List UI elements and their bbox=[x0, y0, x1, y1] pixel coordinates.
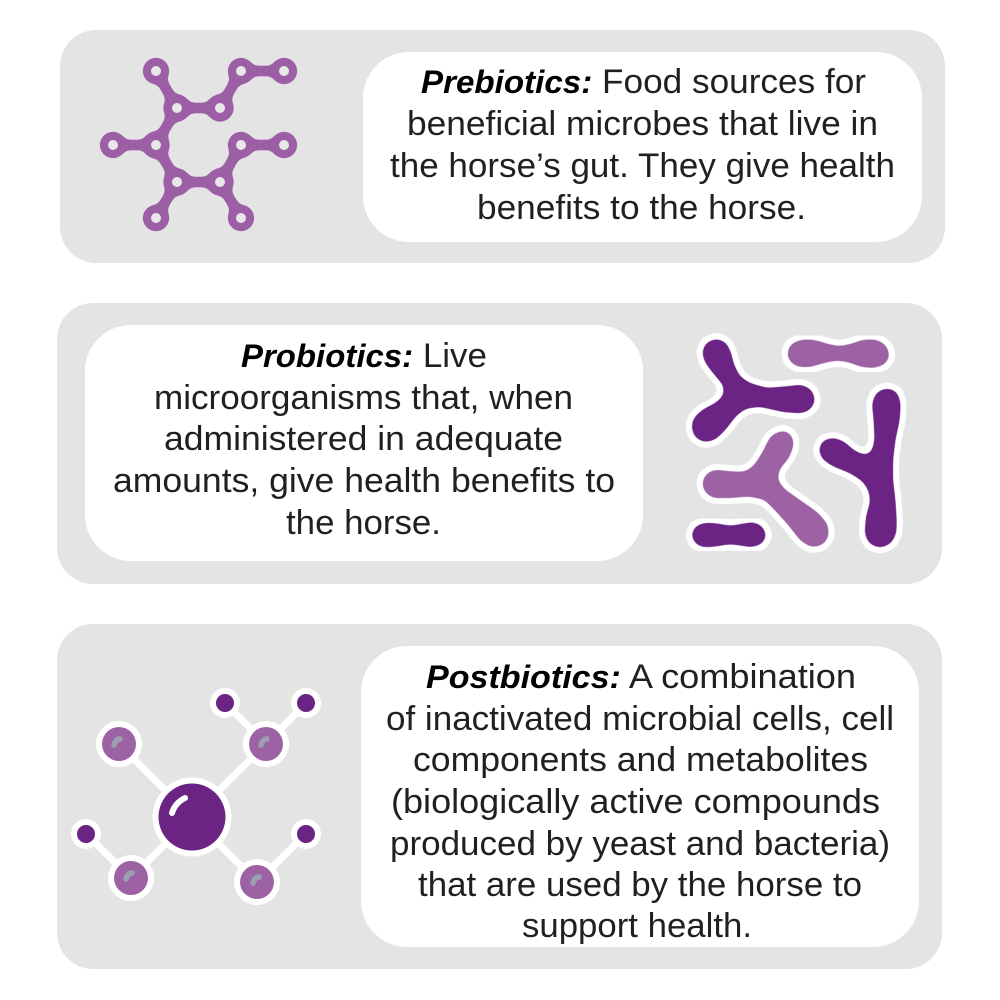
bacterium: pale rod top bbox=[788, 341, 888, 367]
text box: prebiotics definition: Prebiotics: Food sources for bbox=[421, 63, 866, 101]
text box: probiotics definition: Probiotics: Live bbox=[241, 337, 487, 375]
text box: prebiotics definition bbox=[363, 52, 922, 242]
text box: postbiotics definition: of inactivated microbial cells, cell bbox=[386, 700, 894, 738]
text box: probiotics definition: microorganisms that, when bbox=[154, 379, 573, 417]
text box: postbiotics definition: components and metabolites bbox=[413, 741, 868, 779]
text box: prebiotics definition: the horse’s gut. They give health bbox=[390, 147, 895, 185]
text box: probiotics definition: the horse. bbox=[286, 504, 441, 542]
text box: probiotics definition: administered in adequate bbox=[164, 420, 563, 458]
panel: postbiotics bbox=[57, 624, 942, 969]
text box: postbiotics definition: produced by yeast and bacteria) bbox=[390, 825, 890, 863]
panel background: prebiotics bbox=[60, 30, 945, 263]
text box: postbiotics definition: (biologically active compounds bbox=[391, 783, 880, 821]
text box: prebiotics definition: beneficial microbes that live in bbox=[407, 105, 878, 143]
text box: postbiotics definition: support health. bbox=[522, 907, 752, 945]
text box: probiotics definition: amounts, give health benefits to bbox=[113, 462, 615, 500]
bacterium: dark rod bottom left bbox=[693, 523, 765, 546]
icon: prebiotics molecule chain bbox=[100, 58, 297, 231]
panel: probiotics bbox=[57, 303, 942, 584]
panel background: postbiotics bbox=[57, 624, 942, 969]
bacterium: pale branched centre bbox=[703, 432, 827, 546]
text box: postbiotics definition: Postbiotics: A combination bbox=[426, 658, 856, 696]
text box: prebiotics definition: benefits to the horse. bbox=[477, 189, 806, 227]
bacterium: dark branched right bbox=[820, 389, 899, 547]
text box: probiotics definition bbox=[85, 325, 643, 561]
bacterium: dark branched top left bbox=[693, 340, 814, 441]
panel background: probiotics bbox=[57, 303, 942, 584]
icon: postbiotics molecule network bbox=[71, 688, 321, 905]
panel: prebiotics bbox=[60, 30, 945, 263]
icon: bacteria cluster bbox=[693, 340, 899, 547]
text box: postbiotics definition bbox=[361, 646, 919, 947]
text box: postbiotics definition: that are used by the horse to bbox=[418, 866, 862, 904]
